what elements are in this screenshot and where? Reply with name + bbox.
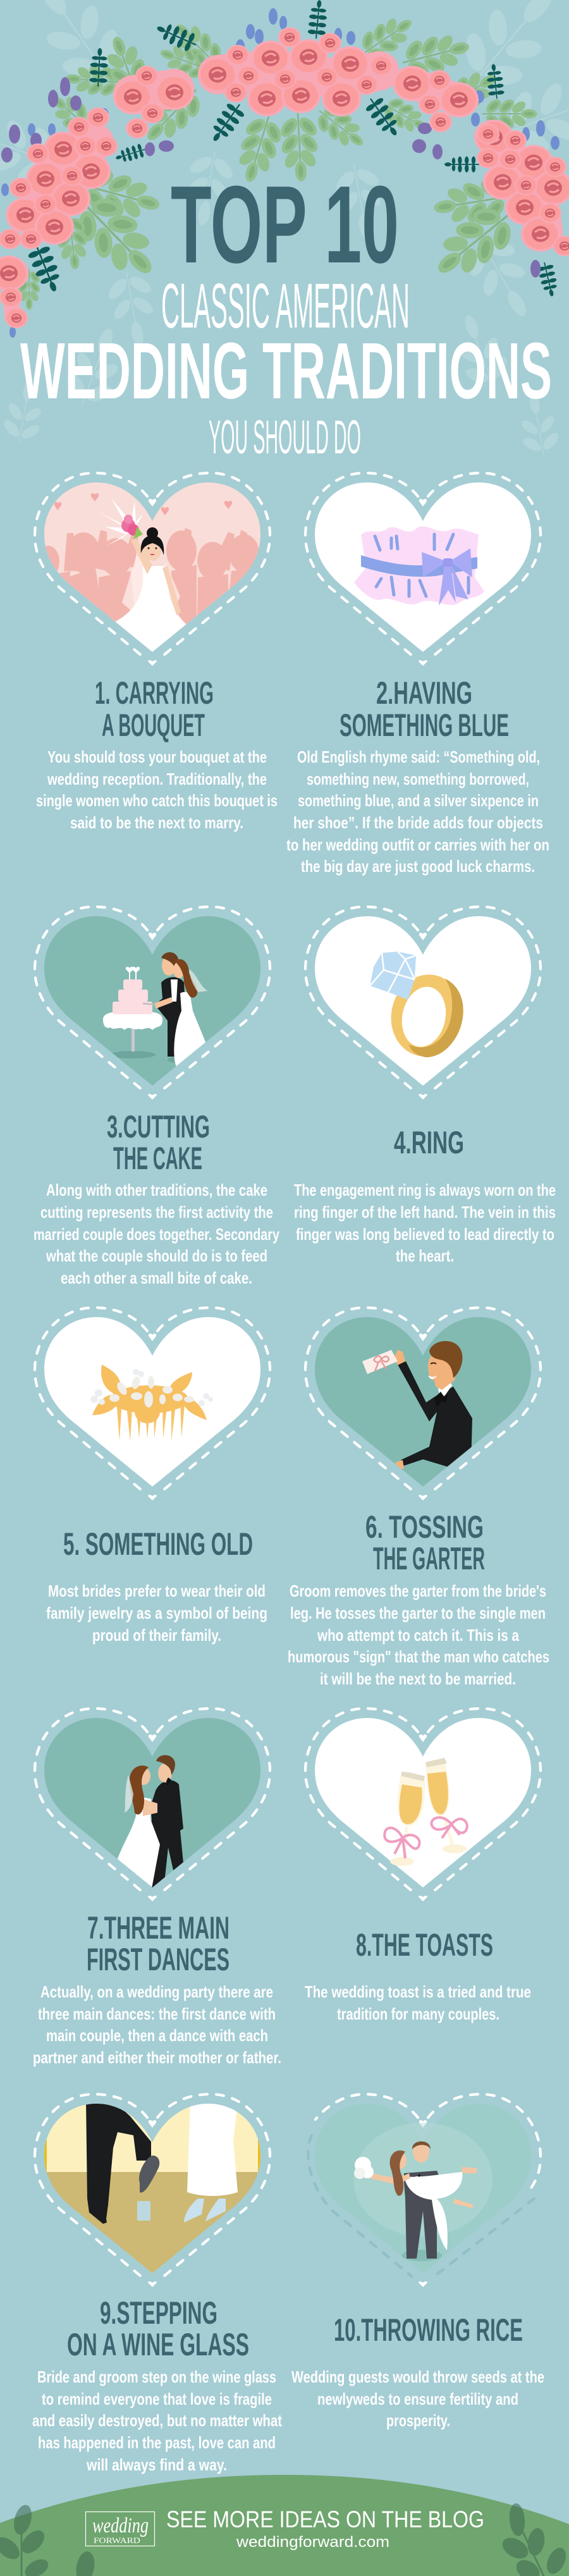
floral arch bbox=[0, 0, 569, 338]
body text: cutting represents the first activity the bbox=[40, 1203, 273, 1222]
body text bbox=[286, 747, 549, 876]
body text bbox=[294, 1181, 556, 1265]
body text: married couple does together. Secondary bbox=[34, 1225, 279, 1244]
heart illustration: stepping on glass bbox=[35, 2094, 270, 2287]
panel: 5 something old bbox=[35, 1308, 270, 1645]
body text: to remind everyone that love is fragile bbox=[42, 2389, 272, 2408]
green leaf sprigs bbox=[16, 6, 537, 310]
heading bbox=[365, 1509, 485, 1576]
panel: 8 the toasts bbox=[305, 1708, 541, 2023]
body text bbox=[33, 1982, 281, 2067]
body text: tradition for many couples. bbox=[337, 2004, 499, 2023]
body text bbox=[305, 1982, 531, 2023]
body text: wedding reception. Traditionally, the bbox=[47, 770, 267, 788]
body text: Bride and groom step on the wine glass bbox=[37, 2367, 276, 2386]
heading bbox=[87, 1910, 229, 1977]
body text: the heart. bbox=[396, 1246, 454, 1265]
heading: 2.HAVING bbox=[376, 675, 472, 711]
body text bbox=[291, 2367, 544, 2430]
logo bbox=[86, 2512, 154, 2546]
body text: and easily destroyed, but no matter what bbox=[32, 2411, 282, 2430]
heading bbox=[95, 675, 214, 743]
body text: prosperity. bbox=[386, 2411, 450, 2430]
body text bbox=[32, 2367, 282, 2474]
body text: family jewelry as a symbol of being bbox=[46, 1604, 267, 1622]
footer green hill bbox=[0, 2475, 569, 2576]
heading: A BOUQUET bbox=[102, 708, 205, 743]
title bbox=[20, 163, 552, 463]
body text: what the couple should do is to feed bbox=[46, 1246, 267, 1265]
body text: Actually, on a wedding party there are bbox=[40, 1982, 273, 2001]
body text: You should toss your bouquet at the bbox=[47, 747, 267, 766]
heart illustration: champagne flutes bbox=[305, 1708, 541, 1901]
heart illustration: garter bbox=[305, 473, 541, 666]
heading: 4.RING bbox=[394, 1125, 464, 1160]
heading: FIRST DANCES bbox=[87, 1942, 229, 1977]
body text: proud of their family. bbox=[92, 1626, 221, 1645]
logo: FORWARD bbox=[94, 2536, 140, 2545]
body text: single women who catch this bouquet is bbox=[36, 791, 278, 810]
heart illustration: groom carrying bride bbox=[308, 2094, 541, 2287]
body text bbox=[36, 747, 278, 832]
body text: main couple, then a dance with each bbox=[46, 2026, 268, 2045]
heart illustration: diamond ring bbox=[305, 907, 541, 1100]
heading: THE CAKE bbox=[113, 1141, 202, 1176]
body text: newlyweds to ensure fertility and bbox=[317, 2389, 518, 2408]
heading: 3.CUTTING bbox=[107, 1109, 210, 1144]
panel: 6 tossing the garter bbox=[288, 1308, 549, 1688]
panel: 1 carrying a bouquet bbox=[35, 473, 278, 832]
panel: 10 throwing rice bbox=[291, 2094, 544, 2430]
heart illustration: bride tossing bouquet bbox=[35, 473, 270, 666]
panel: 7 three main first dances bbox=[33, 1708, 281, 2067]
heading: 6. TOSSING bbox=[365, 1509, 484, 1545]
heading bbox=[107, 1109, 210, 1176]
heading: 7.THREE MAIN bbox=[87, 1910, 229, 1946]
footer leaves bbox=[0, 2503, 569, 2576]
background leaves bbox=[0, 0, 569, 459]
heart illustration: groom holding garter bbox=[305, 1308, 541, 1500]
call to action: SEE MORE IDEAS ON THE BLOG bbox=[166, 2506, 484, 2532]
body text: who attempt to catch it. This is a bbox=[317, 1626, 519, 1645]
body text: each other a small bite of cake. bbox=[61, 1268, 252, 1287]
body text bbox=[34, 1181, 279, 1287]
body text: three main dances: the first dance with bbox=[38, 2004, 276, 2023]
body text: Most brides prefer to wear their old bbox=[48, 1581, 266, 1600]
body text: partner and either their mother or father. bbox=[33, 2048, 281, 2067]
heading: 1. CARRYING bbox=[95, 675, 214, 711]
body text: will always find a way. bbox=[86, 2455, 227, 2474]
panel: 3 cutting the cake bbox=[34, 907, 279, 1287]
panel: 9 stepping on a wine glass bbox=[32, 2094, 282, 2474]
heading bbox=[67, 2295, 249, 2362]
heading: 9.STEPPING bbox=[100, 2295, 217, 2331]
body text: it will be the next to be married. bbox=[320, 1669, 516, 1688]
heart illustration: hair comb bbox=[35, 1308, 270, 1500]
title: top 10: TOP 10 bbox=[171, 163, 399, 286]
small roses bbox=[0, 27, 569, 328]
body text bbox=[288, 1581, 549, 1688]
heading bbox=[340, 675, 509, 743]
footer bbox=[0, 2475, 569, 2576]
body text bbox=[46, 1581, 267, 1645]
heading: ON A WINE GLASS bbox=[67, 2327, 249, 2362]
body text: said to be the next to marry. bbox=[70, 813, 243, 832]
blue and purple buds bbox=[1, 8, 560, 338]
large roses bbox=[0, 39, 569, 291]
logo: wedding bbox=[92, 2514, 149, 2537]
website: weddingforward.com bbox=[236, 2534, 389, 2551]
heart illustration: couple cutting cake bbox=[35, 907, 270, 1100]
heart illustration: first dance couple bbox=[35, 1708, 270, 1901]
panel: 2 having something blue bbox=[286, 473, 549, 876]
panel: 4 ring bbox=[294, 907, 556, 1265]
heading: 5. SOMETHING OLD bbox=[63, 1526, 253, 1562]
body text: Along with other traditions, the cake bbox=[46, 1181, 267, 1199]
body text: has happened in the past, love can and bbox=[38, 2433, 276, 2452]
pink mass behind roses bbox=[9, 70, 544, 316]
dark teal sprigs bbox=[25, 0, 560, 298]
